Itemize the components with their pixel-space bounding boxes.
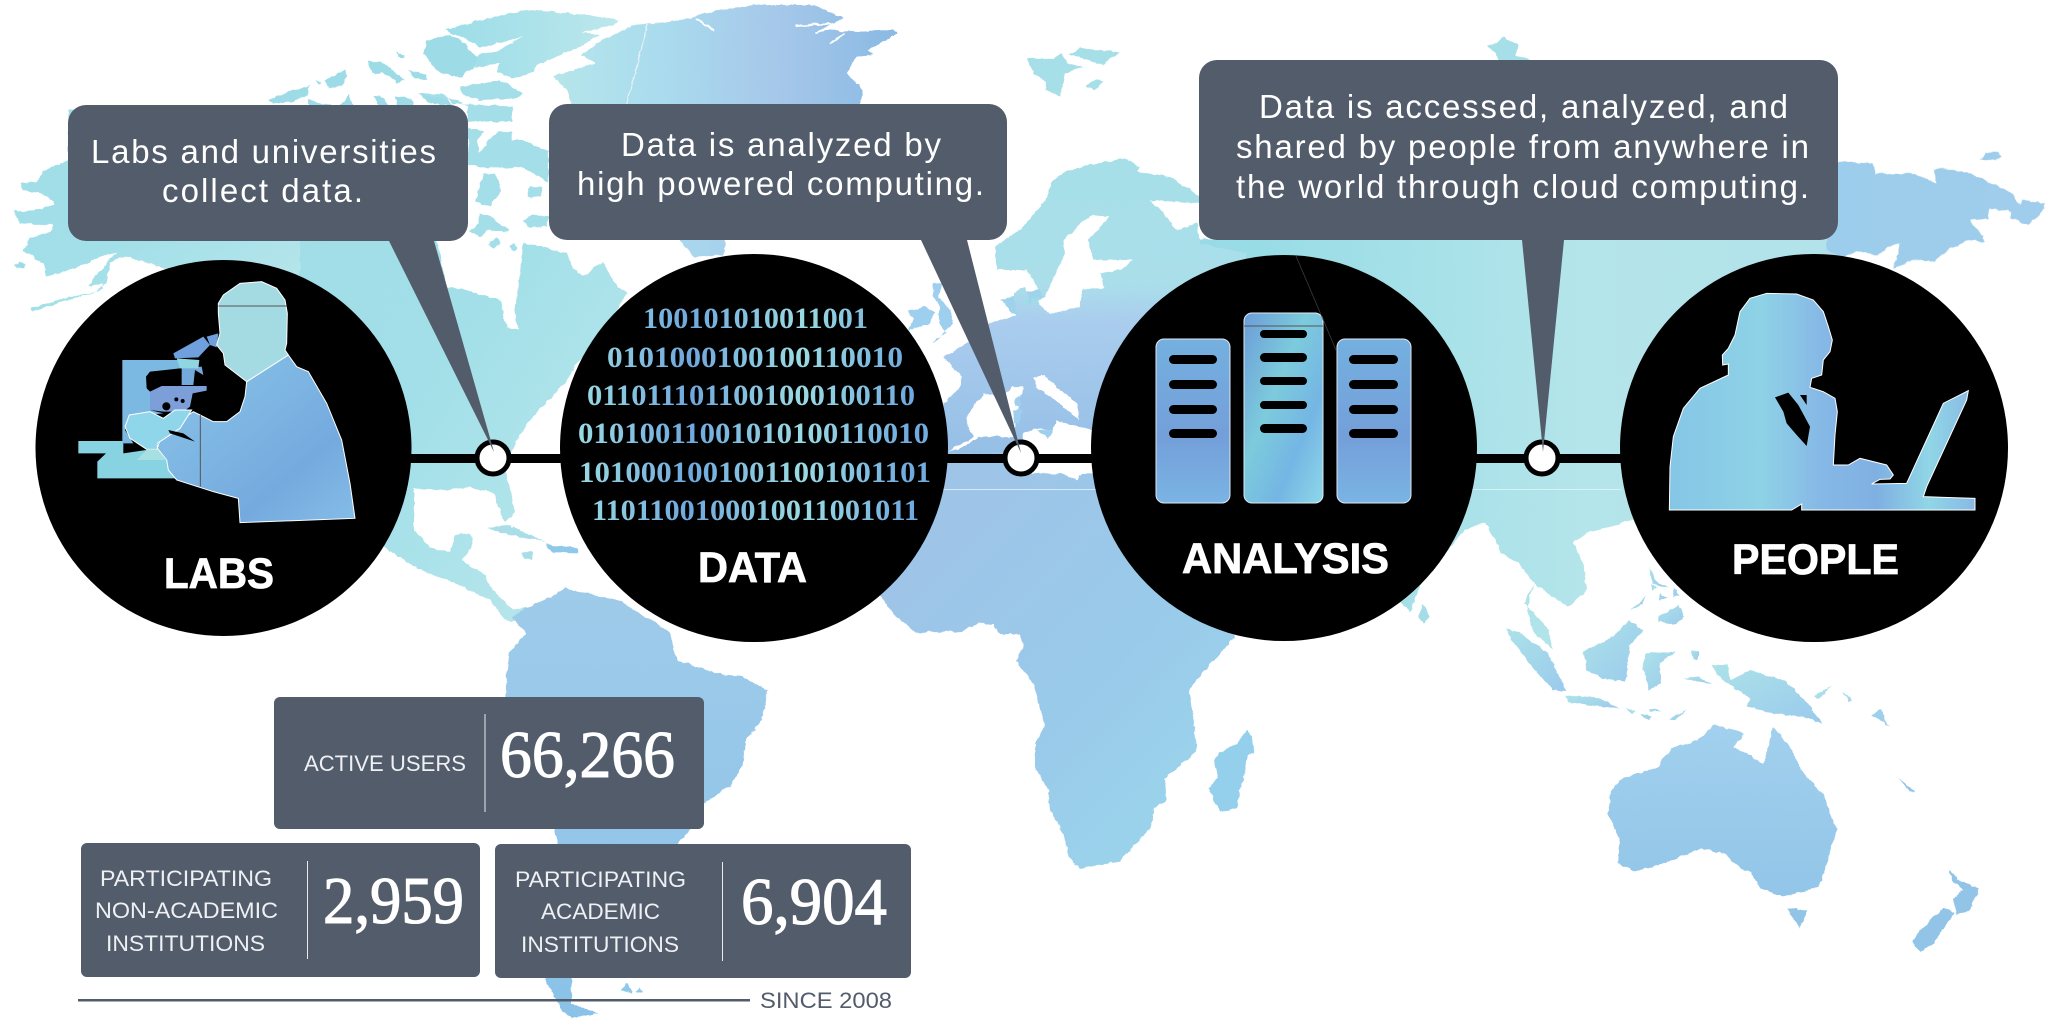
stat: non-academic institutions: PARTICIPATING	[100, 866, 272, 891]
map: North America mainland	[300, 115, 627, 622]
panel: data circle	[560, 254, 948, 642]
stat: non-academic institutions: INSTITUTIONS	[106, 931, 265, 956]
map: Madagascar	[1208, 730, 1254, 812]
map: Falkland Islands	[621, 983, 643, 993]
map: Australia	[1608, 725, 1837, 897]
map: Sri Lanka	[1418, 603, 1430, 624]
stat: academic institutions: INSTITUTIONS	[521, 932, 679, 957]
icon: server left	[1156, 339, 1230, 503]
map: Alaska and western Canada	[13, 110, 333, 333]
map: Russia far east	[1827, 152, 2045, 268]
binary digits: 10100010010011001001101	[579, 456, 931, 489]
stat: non-academic institutions: NON-ACADEMIC	[95, 898, 278, 923]
callout: people: shared by people from anywhere in	[1236, 128, 1809, 165]
stat: non-academic institutions	[81, 843, 480, 977]
icon: scientist at microscope	[78, 282, 355, 523]
map: Svalbard	[1027, 48, 1120, 97]
stat: academic institutions: ACADEMIC	[541, 899, 660, 924]
heading: PEOPLE: PEOPLE	[1732, 536, 1899, 584]
node: analysis to people	[1526, 442, 1558, 474]
map: South America	[506, 588, 767, 1018]
panel: analysis circle	[1091, 255, 1477, 641]
node: labs to data	[477, 442, 509, 474]
callout: data	[549, 104, 1021, 453]
since 2008 rule and label: SINCE 2008	[760, 988, 892, 1013]
heading: LABS: LABS	[164, 550, 274, 598]
stat: active users: 66,266	[500, 718, 675, 792]
map: Tasmania, New Zealand and New Caledonia	[1787, 778, 1980, 952]
icon: person at laptop	[1669, 293, 1975, 510]
map: Europe	[943, 158, 1247, 453]
panel: labs circle	[36, 260, 412, 636]
map: Caribbean islands	[486, 525, 578, 560]
map: UK, Ireland and Mediterranean islands	[907, 283, 1053, 438]
map: eastern Mediterranean	[1040, 463, 1090, 480]
map: Southeast Asia islands	[1506, 567, 1889, 727]
map: Asia	[1000, 200, 1840, 650]
callout: data: Data is analyzed by	[621, 126, 942, 163]
heading: ANALYSIS: ANALYSIS	[1182, 535, 1389, 583]
binary digits	[578, 302, 931, 527]
callout: people: Data is accessed, analyzed, and	[1259, 88, 1788, 125]
stat: active users	[274, 697, 704, 829]
binary digits: 0101000100100110010	[607, 341, 903, 374]
binary digits: 01010011001010100110010	[578, 417, 929, 450]
callout: labs: Labs and universities	[91, 133, 436, 170]
map: Arctic islands east	[418, 10, 618, 252]
map: Africa	[827, 450, 1235, 868]
stat: academic institutions	[495, 844, 911, 978]
map: seas cut out of Europe	[948, 215, 1133, 473]
panel: people circle	[1620, 254, 2008, 642]
binary digits: 1101100100010011001011	[592, 494, 919, 527]
callout: labs	[68, 105, 494, 452]
binary digits: 100101010011001	[643, 302, 868, 335]
stat: active users: ACTIVE USERS	[304, 751, 466, 776]
stat: academic institutions: 6,904	[741, 865, 887, 939]
map: Gulf detail	[1582, 542, 1597, 554]
stat: academic institutions: PARTICIPATING	[515, 867, 686, 892]
callout: people	[1199, 60, 1838, 452]
icon: server right	[1337, 339, 1411, 503]
heading: DATA: DATA	[698, 544, 807, 592]
map: Greenland	[553, 5, 897, 257]
map: Novaya Zemlya	[1488, 37, 1534, 62]
connector line	[400, 454, 1640, 463]
stat: non-academic institutions: 2,959	[323, 864, 464, 938]
binary digits: 0110111011001000100110	[587, 379, 915, 412]
callout: labs: collect data.	[162, 172, 363, 209]
map: Arctic islands west	[14, 52, 455, 268]
icon: server middle	[1244, 313, 1323, 503]
callout: data: high powered computing.	[577, 165, 984, 202]
node: data to analysis	[1005, 442, 1037, 474]
callout: people: the world through cloud computing.	[1236, 168, 1809, 205]
